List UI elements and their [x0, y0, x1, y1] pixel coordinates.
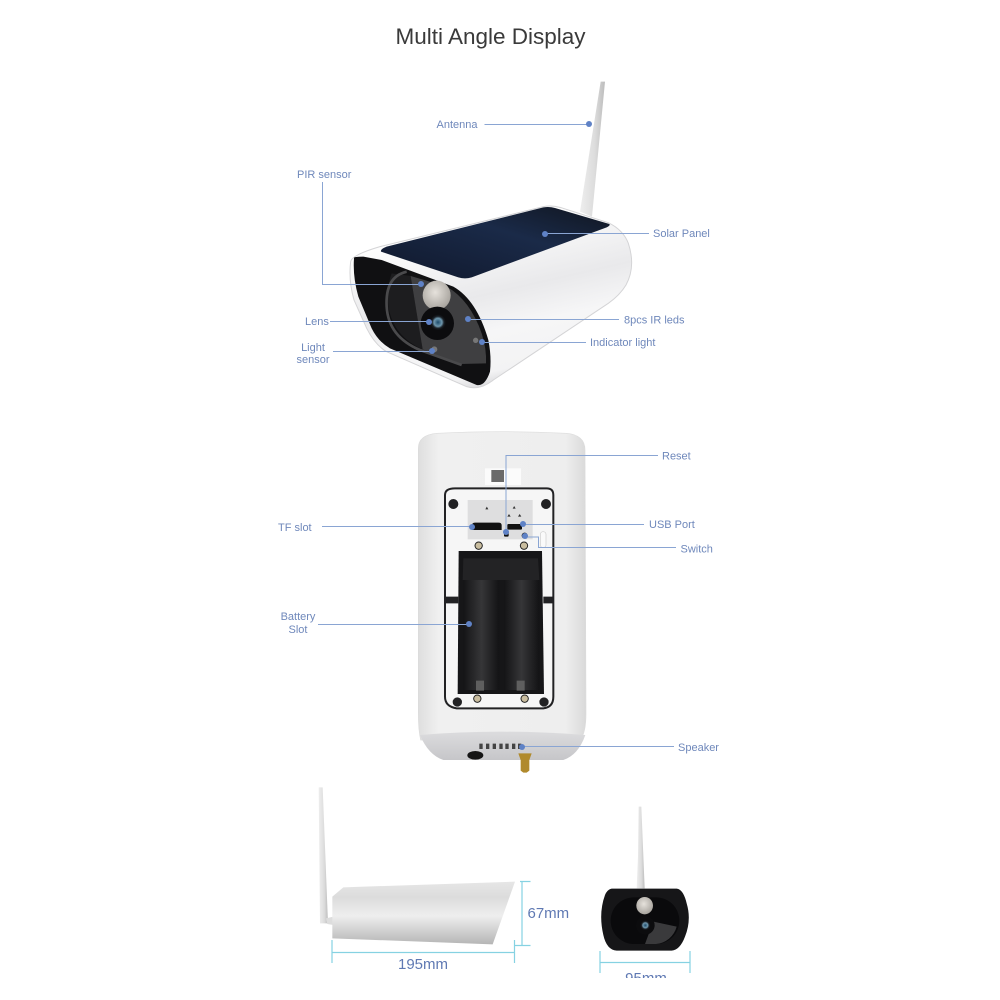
dimension: 67mm — [515, 882, 569, 946]
front lens glass — [640, 920, 650, 930]
battery contacts — [476, 681, 525, 691]
callout: battery slot — [281, 611, 472, 636]
USB port — [507, 524, 522, 530]
lens glass — [430, 314, 446, 330]
dimension: 195mm — [332, 940, 514, 973]
callout: speaker: Speaker — [678, 742, 719, 754]
reset button — [504, 531, 509, 537]
callout: lens — [305, 316, 432, 328]
callout: TF slot — [278, 522, 475, 534]
camera: back view — [418, 432, 586, 773]
callout: antenna: Antenna — [436, 119, 478, 131]
gasket cross ribs — [445, 590, 553, 610]
battery tube right — [504, 580, 539, 690]
side body — [332, 882, 515, 944]
callout: battery slot: Slot — [289, 624, 307, 636]
side antenna — [319, 787, 328, 923]
icon: PIR sensor — [423, 281, 451, 310]
camera: side view — [319, 787, 515, 944]
power jack — [467, 751, 483, 760]
solar panel — [381, 207, 610, 278]
glass highlight — [645, 922, 677, 944]
callout: solar panel — [542, 228, 710, 240]
callout: PIR sensor — [297, 169, 424, 287]
front antenna — [637, 807, 645, 888]
callout: 8pcs IR leds: 8pcs IR leds — [624, 314, 685, 326]
callout: indicator light: Indicator light — [590, 337, 655, 349]
camera: main angled view — [350, 82, 632, 388]
dimension: 95mm: 95mm — [625, 970, 667, 987]
TF slot — [472, 523, 502, 530]
callout: 8pcs IR leds — [465, 314, 685, 326]
icon: indicator light — [473, 338, 478, 343]
dimension: 195mm: 195mm — [398, 956, 448, 973]
camera body — [350, 206, 632, 388]
slot top wall — [463, 558, 539, 580]
callout: reset — [503, 450, 691, 535]
LED window — [540, 532, 546, 548]
front arc ring — [387, 272, 462, 365]
panel marks — [485, 506, 521, 517]
gasket corner bosses — [448, 499, 551, 707]
callout: switch — [522, 533, 713, 556]
dimension: 67mm: 67mm — [528, 905, 569, 922]
QR label — [485, 468, 521, 485]
callout: TF slot: TF slot — [278, 522, 312, 534]
callout: antenna — [436, 119, 592, 131]
back body — [418, 432, 586, 740]
dimension: 95mm — [599, 951, 691, 987]
callout: battery slot: Battery — [281, 611, 316, 623]
callout: switch: Switch — [680, 544, 713, 556]
callout: PIR sensor: PIR sensor — [297, 169, 352, 181]
gasket — [445, 488, 553, 708]
icon: light sensor — [431, 346, 437, 352]
icon: lens — [421, 307, 454, 340]
front PIR — [636, 897, 653, 914]
switch — [522, 533, 528, 539]
bottom cap — [420, 732, 585, 760]
callout: lens: Lens — [305, 316, 329, 328]
front lens — [636, 916, 655, 935]
callout: speaker — [519, 742, 719, 754]
screws top — [474, 542, 528, 702]
speaker holes — [479, 744, 521, 749]
camera: front view — [601, 807, 689, 951]
callout: light sensor — [296, 342, 435, 366]
front glass — [611, 897, 679, 944]
icon: antenna — [580, 82, 605, 217]
callout: reset: Reset — [662, 450, 691, 462]
camera front face — [354, 257, 491, 385]
callout: USB port — [520, 519, 695, 531]
battery tube left — [463, 580, 499, 690]
battery slot — [458, 551, 544, 694]
front housing — [601, 889, 689, 951]
QR code — [491, 470, 504, 482]
port panel — [468, 500, 533, 539]
antenna connector — [518, 753, 532, 773]
front grey plate — [411, 276, 486, 364]
callout: indicator light — [479, 337, 655, 349]
callout: light sensor: Light — [301, 342, 325, 354]
callout: light sensor: sensor — [296, 354, 330, 366]
antenna hinge — [326, 917, 333, 925]
title: Multi Angle Display — [395, 24, 586, 49]
callout: USB port: USB Port — [649, 519, 695, 531]
inner shell — [388, 273, 423, 349]
callout: solar panel: Solar Panel — [653, 228, 710, 240]
